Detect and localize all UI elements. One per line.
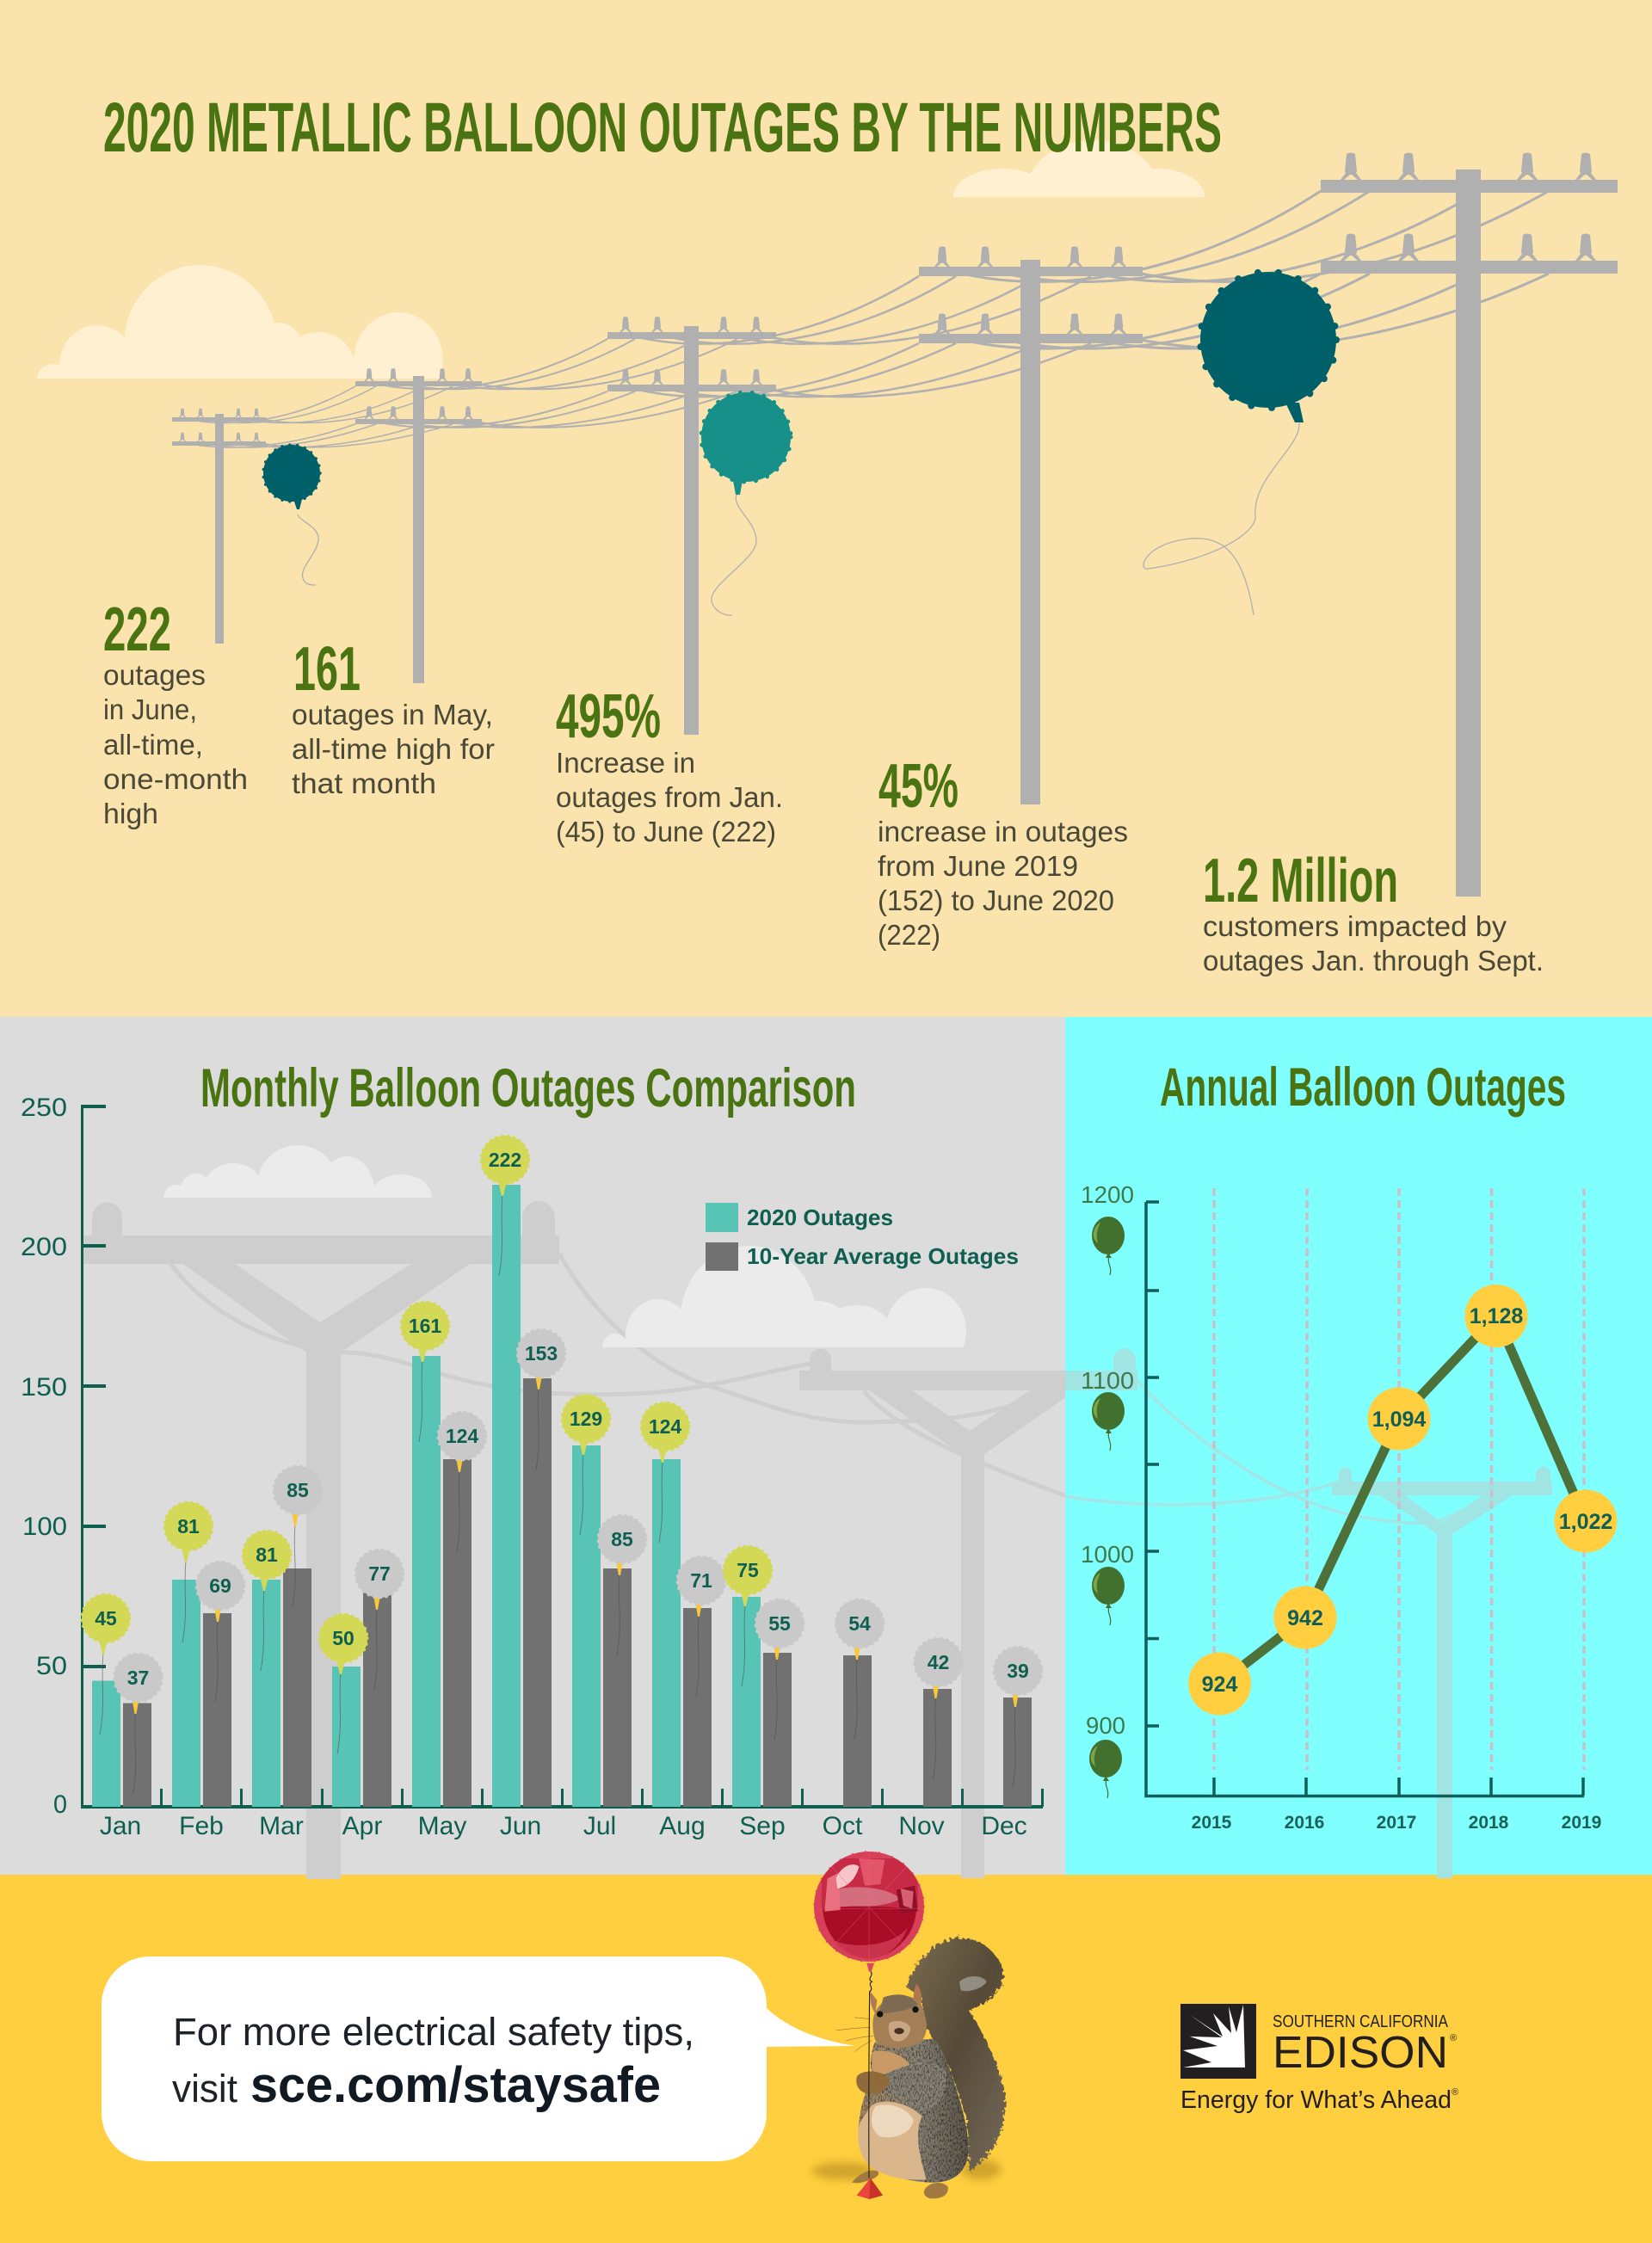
value balloons: 37: [127, 1667, 149, 1689]
month labels: Feb: [179, 1812, 224, 1840]
month labels: Oct: [823, 1812, 863, 1840]
background: poles on cyan panel: [1058, 1348, 1552, 1878]
data points: 1,022: [1559, 1510, 1612, 1534]
stat: 222: all-time,: [103, 729, 203, 761]
cloud: upper right: [953, 140, 1205, 197]
month labels: Jul: [583, 1812, 616, 1840]
month labels: Jan: [100, 1812, 141, 1840]
stat: 222: 222: [103, 595, 171, 664]
data points: [1188, 1285, 1618, 1716]
trend line: [1220, 1316, 1586, 1684]
logo mark: [1180, 2004, 1256, 2079]
year labels: 2018: [1469, 1813, 1509, 1833]
stat: 45%: from June 2019: [878, 850, 1078, 882]
chart title: monthly: Monthly Balloon Outages Comparison: [200, 1058, 856, 1118]
stat: 1.2 Million: [1203, 847, 1544, 977]
y labels with balloon icons: [1081, 1181, 1134, 1798]
data points: 924: [1202, 1673, 1237, 1697]
axes: [1146, 1202, 1584, 1796]
pole 3: [607, 317, 776, 735]
value balloons: 71: [690, 1569, 712, 1592]
power lines between poles: [182, 191, 1549, 447]
stat: 222: in June,: [103, 693, 197, 725]
value balloons: 77: [368, 1562, 391, 1585]
balloon: large teal: [1143, 272, 1336, 615]
hands: [856, 2071, 889, 2094]
logo wordmark: SOUTHERN CALIFORNIA: [1273, 2012, 1449, 2031]
value balloons: 85: [611, 1528, 633, 1550]
call to action text: sce.com/staysafe: [250, 2057, 661, 2113]
stat: 161: that month: [292, 767, 436, 799]
stat: 1.2 Million: customers impacted by: [1203, 910, 1507, 942]
year labels: [1192, 1813, 1601, 1833]
stat: 161: all-time high for: [292, 733, 495, 765]
stat: 45%: (152) to June 2020: [878, 884, 1114, 916]
y labels with balloon icons: 900: [1086, 1712, 1125, 1739]
data points: 1,094: [1372, 1408, 1426, 1432]
data points: 1,128: [1470, 1304, 1523, 1328]
logo wordmark: EDISON: [1273, 2028, 1448, 2078]
value balloons: 124: [446, 1425, 478, 1447]
value balloons: 42: [928, 1651, 949, 1673]
y labels with balloon icons: 1000: [1081, 1541, 1134, 1568]
cloud: chart left: [163, 1145, 432, 1198]
y axis: 200: [21, 1233, 67, 1261]
call to action text: For more electrical safety tips,: [173, 2010, 694, 2054]
month labels: Jun: [500, 1812, 541, 1840]
stat: 161: [292, 635, 495, 799]
stat: 495%: (45) to June (222): [556, 816, 776, 847]
2020 bars: [92, 1185, 761, 1807]
pole 2: [355, 368, 482, 683]
call to action text: visit: [172, 2067, 237, 2111]
panel: annual outages background: [1065, 1017, 1652, 1876]
stat: 1.2 Million: outages Jan. through Sept.: [1203, 945, 1544, 977]
stat: 222: one-month: [103, 763, 248, 795]
pole 1: [172, 409, 266, 644]
value balloons: 69: [209, 1574, 231, 1597]
year labels: 2016: [1285, 1813, 1324, 1833]
stat: 45%: [878, 752, 1128, 951]
balloon: small teal: [263, 445, 320, 585]
line chart: annual outages: [1081, 1181, 1618, 1833]
logo wordmark: ®: [1452, 2087, 1458, 2098]
value balloons: 81: [177, 1515, 200, 1537]
month labels: Sep: [739, 1812, 786, 1840]
stat: 45%: increase in outages: [878, 816, 1128, 847]
y axis: 50: [36, 1652, 67, 1680]
chest: [872, 2051, 910, 2075]
ground shadow: [811, 2160, 1001, 2179]
stat: 495%: [556, 682, 783, 847]
cloud: chart right: [602, 1246, 966, 1347]
logo wordmark: [1180, 2012, 1458, 2114]
value balloons: 85: [287, 1479, 309, 1501]
illustration: squirrel with balloon: [811, 1852, 1005, 2199]
y axis: 0: [53, 1790, 67, 1819]
x axis: [81, 1789, 1044, 1809]
arm: [886, 2063, 946, 2108]
panel: top stats background: [0, 0, 1652, 1017]
red foil balloon: [814, 1852, 924, 1972]
stat: 222: high: [103, 798, 158, 829]
value balloons: 129: [570, 1408, 602, 1430]
logo: Southern California Edison: [1180, 2004, 1458, 2114]
call to action text: [172, 2010, 694, 2113]
value balloons: [82, 1136, 1042, 1794]
value balloons: 55: [768, 1612, 791, 1635]
y labels with balloon icons: 1100: [1081, 1367, 1134, 1394]
value balloons: 222: [489, 1149, 521, 1171]
weight: [857, 2178, 883, 2199]
stat: 161: 161: [293, 635, 361, 704]
value balloons: 45: [95, 1607, 117, 1630]
head: [872, 1996, 927, 2049]
y axis: [21, 1094, 106, 1819]
value balloons: 39: [1007, 1660, 1029, 1682]
speech bubble: [102, 1956, 855, 2161]
stat: 495%: Increase in: [556, 747, 695, 779]
dashed year guides: [1214, 1188, 1584, 1770]
value balloons: 54: [848, 1612, 871, 1635]
background: poles on grey panel: [82, 1201, 1076, 1879]
year labels: 2017: [1377, 1813, 1416, 1833]
y labels with balloon icons: 1200: [1081, 1181, 1134, 1208]
month labels: [100, 1812, 1027, 1840]
string: [869, 1972, 872, 2178]
stat: 161: outages in May,: [292, 699, 493, 730]
balloon: medium teal: [701, 392, 791, 615]
legend: 2020 Outages: [747, 1205, 893, 1230]
stat: 222: [103, 595, 248, 829]
value balloons: 161: [409, 1315, 441, 1337]
feet: [852, 2171, 878, 2183]
legend: 10-Year Average Outages: [747, 1243, 1019, 1269]
pole 4: [919, 246, 1143, 804]
y axis: 250: [21, 1094, 67, 1122]
stat: 495%: 495%: [556, 682, 661, 751]
year labels: 2019: [1562, 1813, 1601, 1833]
stat: 222: outages: [103, 659, 206, 691]
stat: 1.2 Million: 1.2 Million: [1203, 847, 1398, 915]
10-year average bars: [123, 1378, 1032, 1807]
pole 5: [1321, 153, 1618, 897]
whiskers: [836, 2018, 873, 2052]
panel: monthly comparison background: [0, 1017, 1065, 1876]
bar chart: monthly outages: [21, 1094, 1044, 1840]
logo wordmark: ®: [1450, 2033, 1457, 2043]
y axis: 100: [22, 1513, 67, 1541]
value balloons: 124: [649, 1415, 681, 1438]
stat: 45%: 45%: [878, 752, 959, 821]
value balloons: 153: [525, 1342, 558, 1365]
body: [859, 2038, 969, 2183]
ears: [870, 1984, 922, 2013]
logo wordmark: Energy for What’s Ahead: [1180, 2086, 1452, 2114]
y axis: 150: [21, 1373, 67, 1402]
month labels: Dec: [981, 1812, 1027, 1840]
month labels: Nov: [898, 1812, 945, 1840]
eyes and nose: [877, 2006, 919, 2034]
month labels: May: [418, 1812, 466, 1840]
year labels: 2015: [1192, 1813, 1232, 1833]
month labels: Aug: [659, 1812, 706, 1840]
value balloons: 75: [737, 1559, 759, 1581]
pole stubs over footer edge: [306, 1875, 1452, 1879]
month labels: Mar: [259, 1812, 304, 1840]
stat: 45%: (222): [878, 919, 940, 951]
month labels: Apr: [342, 1812, 382, 1840]
legend: [706, 1203, 1019, 1271]
stat: 495%: outages from Jan.: [556, 781, 783, 813]
value balloons: 81: [256, 1544, 278, 1566]
value balloons: 50: [332, 1627, 354, 1649]
data points: 942: [1287, 1606, 1323, 1630]
panel: footer background: [0, 1875, 1652, 2243]
cloud: large left: [37, 265, 443, 379]
belly: [858, 2102, 927, 2180]
tail: [906, 1938, 1005, 2171]
